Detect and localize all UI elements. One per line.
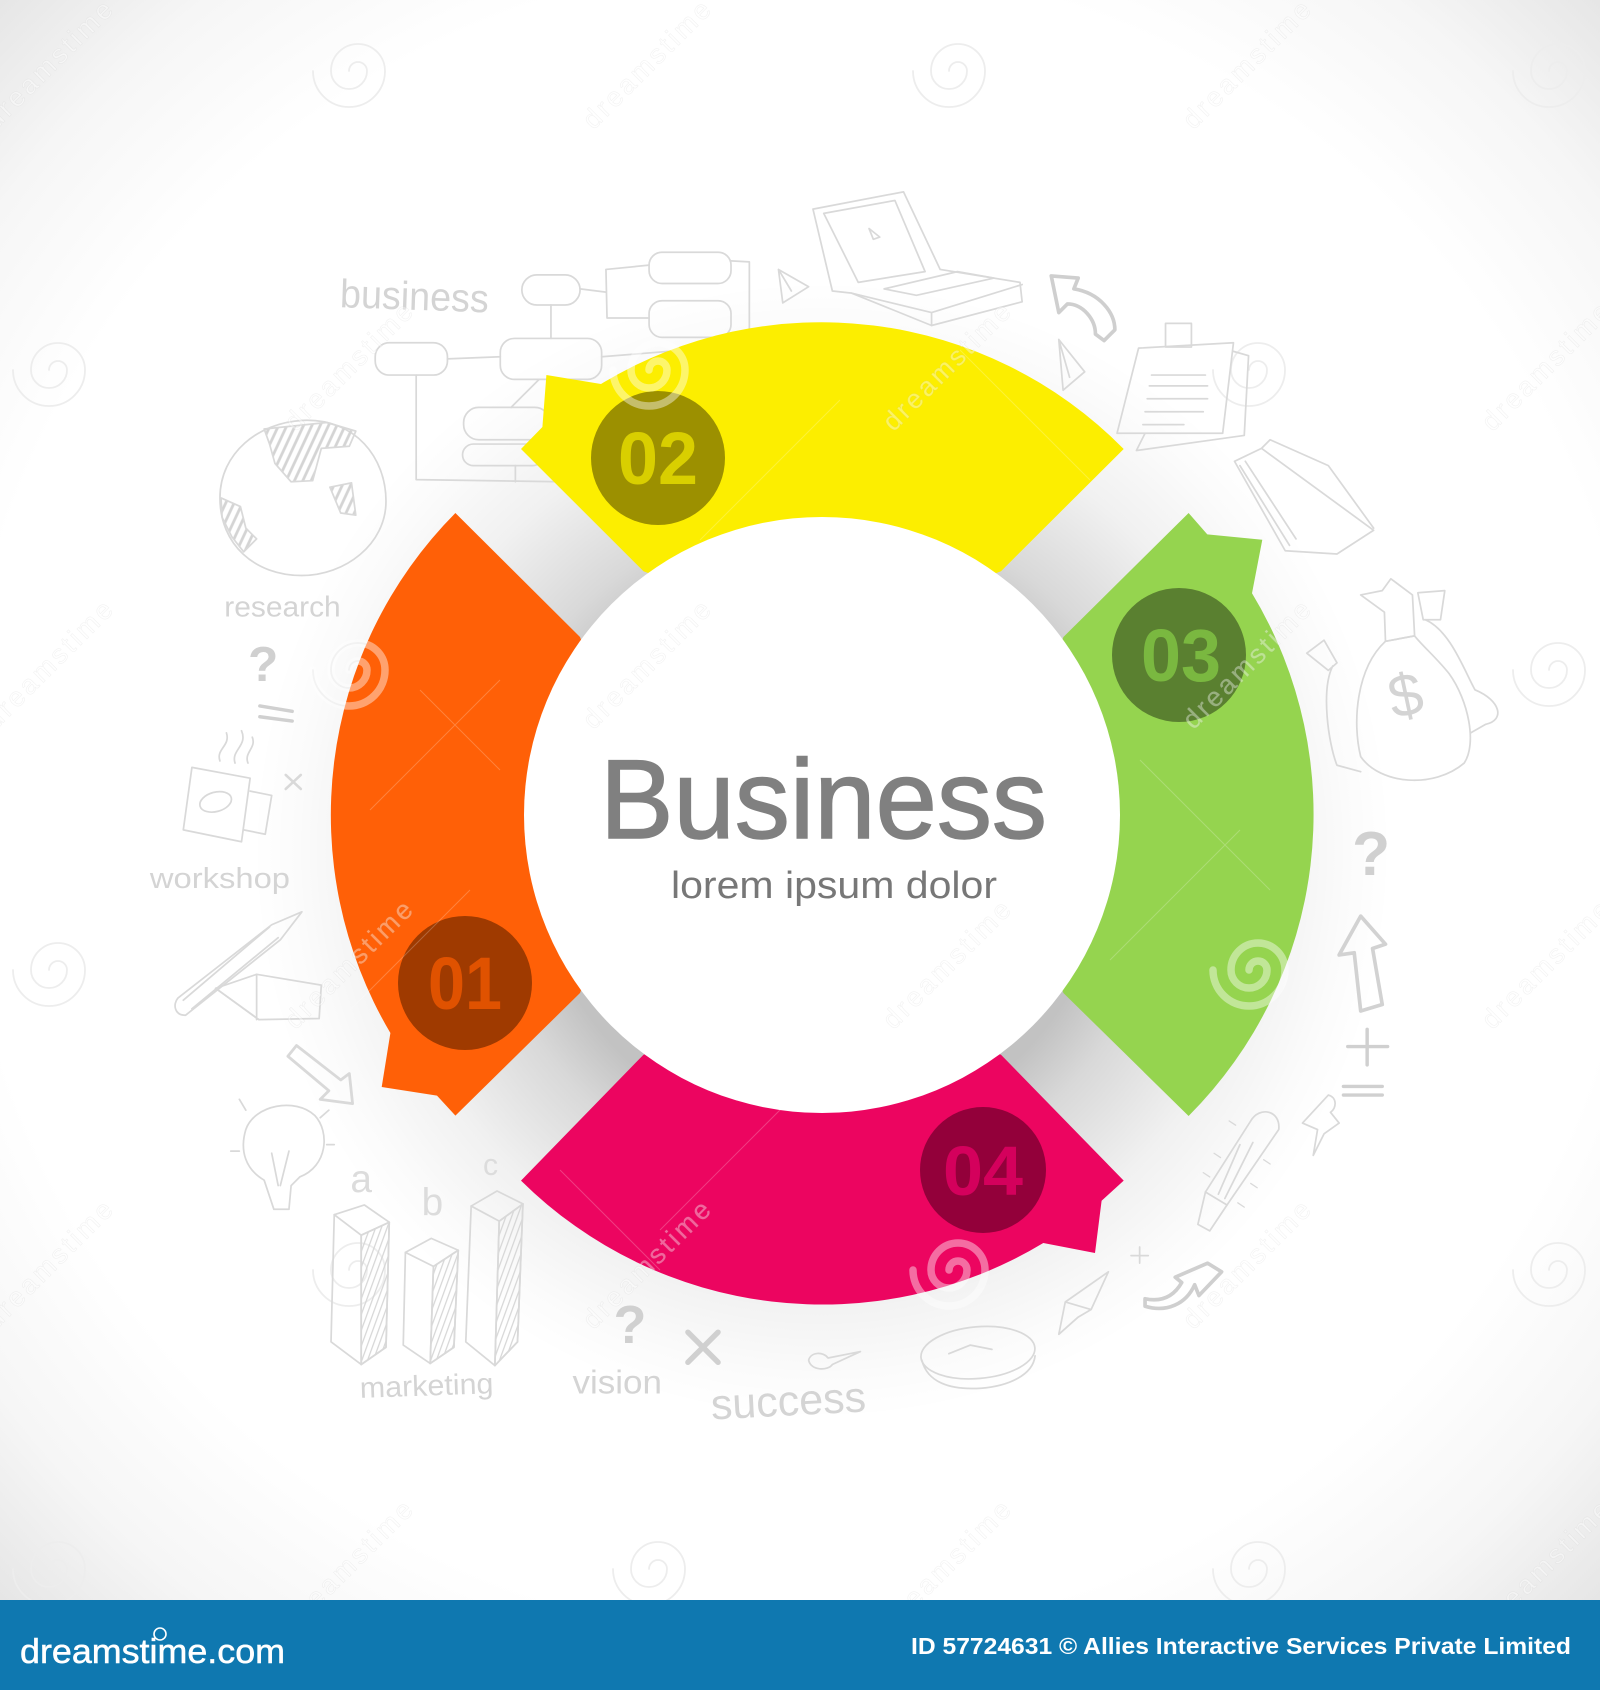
icon: globe xyxy=(220,420,386,576)
icon: laptop xyxy=(813,192,1022,325)
label: research: research xyxy=(224,592,341,624)
icon: push pin bottom xyxy=(809,1352,860,1369)
badge 02 xyxy=(591,391,725,525)
watermark text: dreamstime xyxy=(577,593,719,735)
icon: book xyxy=(1235,440,1374,554)
subtitle: lorem ipsum dolor xyxy=(671,865,997,907)
label: business: business xyxy=(339,272,490,321)
icon: multiply left xyxy=(286,775,301,789)
icon: push pin right xyxy=(1302,1095,1339,1155)
chart: hand-drawn bars xyxy=(331,1191,523,1366)
footer credit: ID 57724631 © Allies Interactive Services Private Limited xyxy=(911,1633,1571,1659)
icon: arrow down right xyxy=(288,1045,353,1104)
icon: question mark bottom: ? xyxy=(613,1295,646,1355)
icon: paper plane lower right xyxy=(1059,1272,1108,1334)
icon: light bulb left xyxy=(231,1099,334,1209)
badge 03: 03 xyxy=(1141,614,1221,697)
label: letter a: a xyxy=(350,1158,372,1201)
centre circle xyxy=(524,517,1120,1113)
icon: question mark right: ? xyxy=(1352,819,1390,889)
label: vision: vision xyxy=(573,1365,662,1402)
label: success: success xyxy=(710,1373,867,1429)
icon: paper plane top xyxy=(778,269,809,303)
icon: watch xyxy=(919,1322,1037,1389)
icon: curvy arrow lower right xyxy=(1145,1263,1222,1308)
badge 01: 01 xyxy=(428,942,502,1025)
ring drop shadow xyxy=(252,280,1392,1420)
icon: coffee cup xyxy=(183,731,272,842)
icon: question mark left: ? xyxy=(248,636,278,692)
badge 03 xyxy=(1112,588,1246,722)
badge 04: 04 xyxy=(943,1132,1023,1210)
footer logo: dreamstime.com xyxy=(20,1633,285,1671)
icon: equals left xyxy=(260,706,292,721)
icon: plus lower right xyxy=(1131,1247,1148,1263)
watermark text: dreamstime xyxy=(279,1493,421,1635)
segment: yellow 02 xyxy=(521,322,1124,640)
icon: tube bulb xyxy=(1198,1112,1279,1231)
watermark text: dreamstime xyxy=(877,1493,1019,1635)
icon: multiply bottom xyxy=(688,1332,718,1362)
footer bar xyxy=(0,1600,1600,1690)
title: Business xyxy=(600,737,1047,862)
label: letter b: b xyxy=(422,1182,443,1225)
label: letter c: c xyxy=(483,1149,498,1182)
watermark text: dreamstime xyxy=(1177,593,1319,735)
icon: money bags: $ xyxy=(1382,658,1429,732)
icon: equals right xyxy=(1343,1086,1382,1095)
icon: flowchart xyxy=(375,252,749,482)
icon: paper plane upper right xyxy=(1059,340,1085,390)
watermark text: dreamstime xyxy=(1177,1193,1319,1335)
label: marketing: marketing xyxy=(359,1368,494,1405)
watermark text: dreamstime xyxy=(577,1193,719,1335)
icon: curved arrow upper right xyxy=(1051,276,1115,341)
faint crosshair lines on segments xyxy=(350,350,1270,1270)
icon: money bags xyxy=(1307,579,1498,780)
doodle background illustrations xyxy=(149,192,1498,1429)
badge 01 xyxy=(398,916,532,1050)
icon: pencil and eraser xyxy=(175,912,321,1020)
watermark spirals over artwork xyxy=(313,343,1285,1306)
watermark text: dreamstime xyxy=(877,893,1019,1035)
icon: arrow up xyxy=(1339,916,1385,1011)
badge 04 xyxy=(920,1107,1046,1233)
watermark text: dreamstime xyxy=(279,893,421,1035)
segment: orange 01 xyxy=(331,513,650,1116)
badge 02: 02 xyxy=(618,417,698,500)
label: workshop: workshop xyxy=(149,863,290,895)
icon: plus right xyxy=(1348,1029,1388,1065)
icon: notes with clip xyxy=(1117,323,1249,451)
segment: pink 04 xyxy=(521,990,1124,1305)
watermark text: dreamstime xyxy=(877,295,1019,437)
watermark text: dreamstime xyxy=(279,295,421,437)
segment: green 03 xyxy=(995,513,1314,1116)
